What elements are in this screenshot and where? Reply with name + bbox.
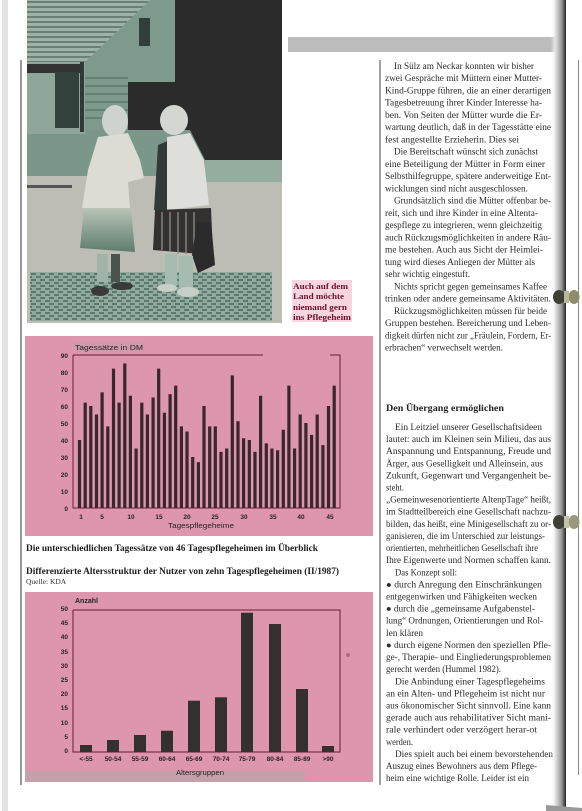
text block: right column bottom: rale verhindert oder verzögert herar-ot <box>386 725 538 735</box>
y axis labels <box>61 606 68 755</box>
y axis labels: 80 <box>61 370 68 377</box>
text block: right column top: tung wird dieses Anliegen der Mütter als <box>385 257 535 267</box>
text block: right column bottom: entgegenwirken und Fähigkeiten wecken <box>386 592 538 602</box>
text block: right column bottom: gerade auch aus rehabilitativer Sicht mani- <box>386 713 551 723</box>
text block: right column top: Gruppen bestehen. Bereicherung und Leben- <box>385 318 551 328</box>
photo caption: Auch auf dem <box>293 281 348 291</box>
left page margin strip <box>2 0 8 811</box>
x axis labels: >90 <box>322 756 334 763</box>
y axis labels <box>61 353 68 513</box>
x axis labels: 15 <box>155 514 163 521</box>
caption: age structure chart <box>26 566 339 586</box>
y axis labels: 10 <box>61 489 68 496</box>
text block: right column top: Die Bereitschaft wünscht sich zunächst <box>394 147 538 157</box>
x axis labels: 5 <box>100 514 104 521</box>
x axis title: Altersgruppen <box>176 770 224 777</box>
text block: right column top: me bestehen. Auch aus Sicht der Heimlei- <box>385 245 543 255</box>
x axis labels <box>79 514 334 521</box>
text block: right column top: gespflege zu integrieren, wenn gleichzeitig <box>385 220 543 230</box>
text block: right column top: zwei Gespräche mit Müttern einer Mutter- <box>385 73 542 83</box>
text block: right column bottom: gerecht werden (Hummel 1982). <box>386 664 501 674</box>
text block: right column top: ben. Von Seiten der Mütter wurde die Er- <box>385 110 542 120</box>
source line: Quelle: KDA <box>26 577 67 586</box>
text block: right column bottom: Auszug eines Bewohners aus dem Pflege- <box>386 761 537 771</box>
x axis labels: <-55 <box>79 756 93 763</box>
x axis labels: 10 <box>127 514 135 521</box>
x axis labels: 70-74 <box>213 756 230 763</box>
x axis labels: 40 <box>297 514 305 521</box>
text block: right column top: wicklungen sind nicht ausgeschlossen. <box>385 184 528 194</box>
x axis labels: 80-84 <box>267 756 284 763</box>
y axis labels: 10 <box>61 720 68 727</box>
text block: right column top: Grundsätzlich sind die Mütter offenbar be- <box>394 196 551 206</box>
text block: right column bottom: orientierten, mehrheitlichen Gesellschaft ihre <box>386 543 538 553</box>
text block: right column bottom: ge-, Therapie- und Eingliederungsproblemen <box>386 652 552 662</box>
text block: right column bottom: steht. <box>386 482 404 492</box>
x axis labels: 65-69 <box>186 756 203 763</box>
text block: right column bottom: len klären <box>386 628 424 638</box>
y axis labels: 40 <box>61 634 68 641</box>
heading: right column section: Den Übergang ermöglichen <box>386 401 505 414</box>
x axis labels: 55-59 <box>132 756 149 763</box>
text block: right column top: Nichts spricht gegen gemeinsames Kaffee <box>394 282 547 292</box>
text block: right column bottom: Anspannung und Entspannung, Freude und <box>386 446 552 456</box>
y axis labels: 50 <box>61 421 68 428</box>
text block: right column top: wartung deutlich, daß in der Tagesstätte eine <box>385 122 551 132</box>
grey header bar <box>288 37 555 52</box>
staple: upper <box>553 290 580 304</box>
text block: right column bottom: Die Anbindung einer Tagespflegeheims <box>395 676 546 686</box>
text block: right column bottom: Ihre Eigenwerte und Normen schaffen kann. <box>386 555 551 565</box>
text block: right column bottom: lung“ Ordnungen, Orientierungen und Rol- <box>386 616 543 626</box>
text block: right column top: reit, sich und ihre Kinder in eine Altenta- <box>385 208 538 218</box>
bars: age groups <box>80 613 334 752</box>
text block: right column bottom: ● durch die „gemeinsame Aufgabenstel- <box>386 604 535 614</box>
y axis labels: 20 <box>61 691 68 698</box>
y axis labels: 70 <box>61 387 68 394</box>
text block: right column bottom: ● durch Anregung den Einschränkungen <box>386 579 543 589</box>
text block: right column top: trinken oder andere gemeinsame Aktivitäten. <box>385 294 551 304</box>
text block: right column top: In Sülz am Neckar konnten wir bisher <box>394 61 534 71</box>
text block: right column bottom: Ein Leitziel unserer Gesellschaftsideen <box>395 422 543 432</box>
y axis labels: 15 <box>61 705 68 712</box>
photo caption: Land möchte <box>293 291 344 301</box>
dot mark <box>346 653 350 657</box>
y axis labels: 0 <box>64 506 68 513</box>
text block: right column bottom: an ein Alten- und Pflegeheim ist nicht nur <box>386 688 545 698</box>
text block: right column top: Rückzugsmöglichkeiten müssen für beide <box>394 306 547 316</box>
x axis title: Tagespflegeheime <box>168 523 234 530</box>
y axis labels: 50 <box>61 606 68 613</box>
y axis labels: 45 <box>61 620 68 627</box>
y axis labels: 35 <box>61 649 68 656</box>
y axis labels: 40 <box>61 438 68 445</box>
panel: bar chart of daily rates <box>25 336 373 536</box>
y axis labels: 30 <box>61 455 68 462</box>
chart title: Anzahl: Anzahl <box>75 598 98 605</box>
photo caption: niemand gern <box>293 302 347 312</box>
text block: right column bottom: „Gemeinwesenorientierte AltenpTage“ heißt, <box>386 495 551 505</box>
bars: 46 day-care homes <box>80 364 334 508</box>
staple: lower <box>553 515 580 529</box>
x axis labels: 75-79 <box>239 756 256 763</box>
text block: right column bottom: im Stadtteilbereich eine Gesellschaft nachzu- <box>386 507 551 517</box>
y axis labels: 30 <box>61 663 68 670</box>
photo: two elderly women talking in a village <box>27 0 282 323</box>
chart title: Tagessaetze in DM: Tagessätze in DM <box>75 345 143 352</box>
text block: right column bottom: ● durch eigene Normen den speziellen Pfle- <box>386 640 551 650</box>
text block: right column top: eine Beteiligung der Mütter in Form einer <box>385 159 545 169</box>
text block: right column top: Tagesbetreuung ihrer Kinder Interesse ha- <box>385 98 542 108</box>
x axis labels: 60-64 <box>159 756 176 763</box>
x axis labels: 50-54 <box>105 756 122 763</box>
text block: right column top: fest angestellte Erzieherin. Dies sei <box>385 134 520 144</box>
text block: right column bottom: Ärger, aus Geselligkeit und Alleinsein, aus <box>386 458 543 468</box>
photo caption <box>292 280 352 322</box>
text block: right column top: digkeit dürfen nicht zur „Fräulein, Fordern, Er- <box>385 330 551 340</box>
text block: right column top: Kind-Gruppe führen, die an einer derartigen <box>385 86 552 96</box>
chart frame <box>73 355 340 508</box>
y axis labels: 20 <box>61 472 68 479</box>
text block: right column top: erbrachen“ verwechselt werden. <box>385 343 503 353</box>
text block: right column bottom: aus ökonomischer Sicht sinnvoll. Eine kann <box>386 700 552 710</box>
x axis labels: 85-89 <box>294 756 311 763</box>
text block: right column bottom: heim eine wichtige Rolle. Leider ist ein <box>386 773 529 783</box>
x axis labels: 30 <box>240 514 248 521</box>
x axis labels: 20 <box>183 514 191 521</box>
figure: left woman <box>80 105 144 296</box>
panel: bar chart of age groups <box>25 592 373 782</box>
text block: right column bottom: Das Konzept soll: <box>395 567 457 577</box>
y axis labels: 90 <box>61 353 68 360</box>
figure: right woman <box>153 105 215 297</box>
text block: right column bottom: lautet: auch im Kleinen sein Milieu, das aus <box>386 434 552 444</box>
photo caption: ins Pflegeheim <box>293 312 351 322</box>
text block: right column bottom: bilden, das heißt, eine Minigesellschaft zu or- <box>386 519 551 529</box>
magazine spine shadow <box>546 0 582 811</box>
text block: right column top: sehr wichtig eingestuft. <box>385 269 470 279</box>
chart title: Tagessaetze in DM <box>73 342 143 352</box>
y axis labels: 0 <box>64 748 68 755</box>
right column rule <box>380 60 381 785</box>
text block: right column top <box>385 61 552 353</box>
text block: right column bottom: werden. <box>386 737 413 747</box>
text block: right column top: Selbsthilfegruppe, spätere anderweitige Ent- <box>385 171 551 181</box>
caption: bar chart one: Die unterschiedlichen Tagessätze von 46 Tagespflegeheimen im Überblick <box>26 543 318 553</box>
y axis labels: 60 <box>61 404 68 411</box>
text block: right column bottom: Zukunft, Gegenwart und Vergangenheit be- <box>386 470 551 480</box>
chart frame <box>73 610 340 752</box>
text block: right column top: auch Rückzugsmöglichkeiten in andere Räu- <box>385 232 551 242</box>
left column rule <box>20 60 22 785</box>
text block: right column bottom: Dies spielt auch bei einem bevorstehenden <box>395 749 554 759</box>
x axis labels: 25 <box>211 514 219 521</box>
text block: right column bottom <box>386 422 554 783</box>
x axis labels: 45 <box>326 514 334 521</box>
caption: age structure chart: Differenzierte Altersstruktur der Nutzer von zehn Tagespflegeheimen (II/1987) <box>26 566 339 576</box>
y axis labels: 5 <box>64 734 68 741</box>
x axis labels: 1 <box>79 514 83 521</box>
y axis labels: 25 <box>61 677 68 684</box>
text block: right column bottom: ganisieren, die im Unterschied zur leistungs- <box>386 531 545 541</box>
x axis labels <box>79 756 334 763</box>
x axis labels: 35 <box>269 514 277 521</box>
